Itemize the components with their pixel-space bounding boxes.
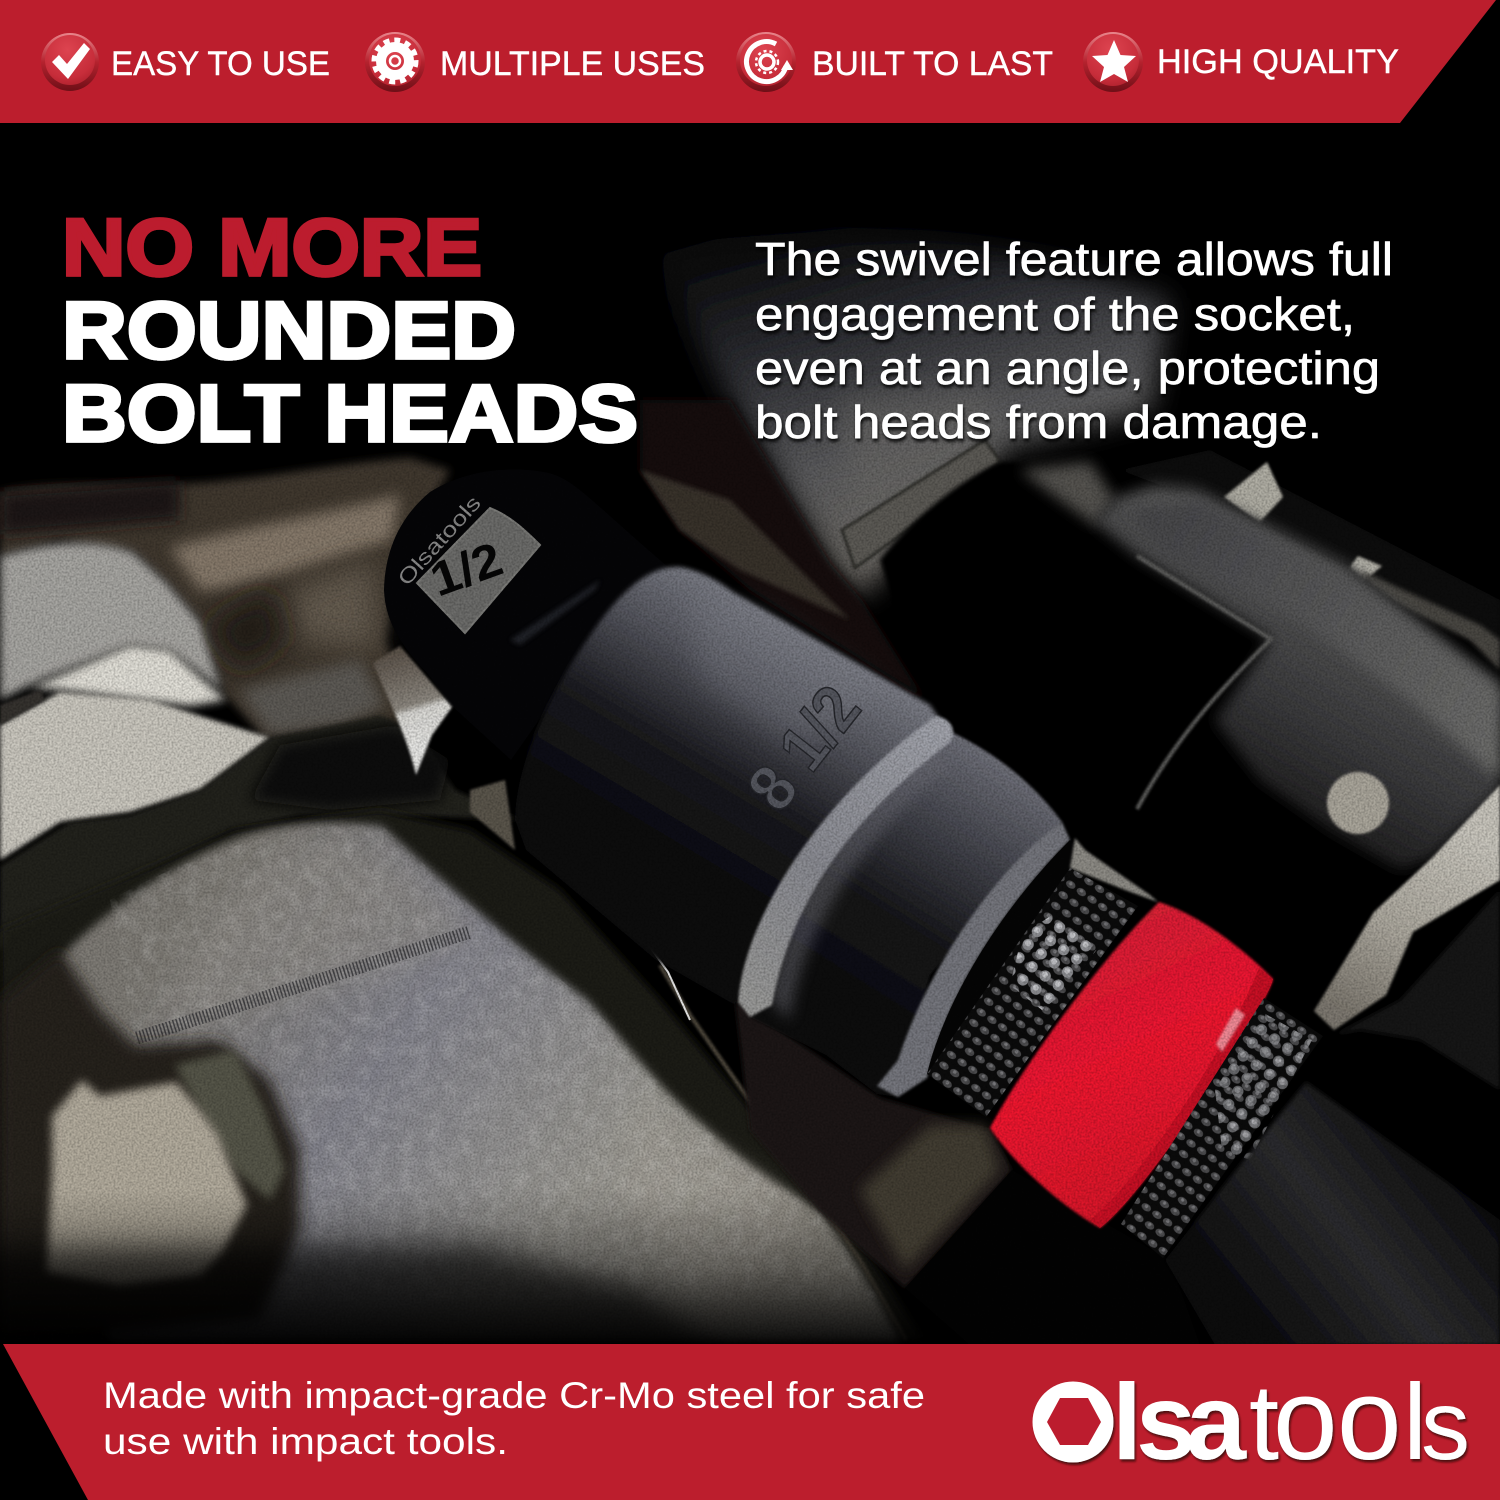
large black socket, right: [880, 462, 1500, 1090]
logo: Olsatools: o: [1337, 1354, 1402, 1484]
black drive shaft: [1165, 1082, 1500, 1345]
socket light grey collar: [738, 716, 953, 1017]
benefit: high quality: HIGH QUALITY: [1157, 43, 1399, 81]
headline line: no more: NO MORE: [62, 203, 482, 293]
logo: Olsatools: l: [1403, 1361, 1427, 1482]
icon: circular arrow with gear: [736, 32, 796, 92]
logo: Olsatools: t: [1249, 1361, 1279, 1482]
description paragraph: bolt heads from damage.: [755, 396, 1322, 448]
headline: [62, 203, 638, 459]
engine metal: upper left casting: [0, 458, 520, 950]
swivel black joint with size badge: [373, 469, 668, 775]
knurled ring, right: [1121, 998, 1323, 1258]
badge brand mark: Olsatools: [394, 492, 486, 590]
benefit: built to last: BUILT TO LAST: [812, 45, 1053, 83]
footer note: use with impact tools.: [103, 1421, 508, 1462]
pipe serrated line: [137, 932, 470, 1038]
white shard: [373, 646, 452, 775]
logo: Olsatools: lsa: [1112, 1361, 1247, 1482]
knurled ring, left: [927, 868, 1138, 1117]
icon: checkmark: [41, 33, 99, 91]
red collar: [990, 902, 1273, 1228]
socket inner dark gap: [927, 840, 1090, 1074]
benefit: easy to use: EASY TO USE: [111, 45, 330, 83]
pipe bottom fade: [0, 1190, 930, 1400]
size badge: 1/2: [424, 533, 509, 607]
headline line: rounded: ROUNDED: [62, 286, 516, 376]
description paragraph: [755, 233, 1393, 448]
headline line: bolt heads: BOLT HEADS: [62, 369, 638, 459]
engine metal: large silver pipe, lower left: [0, 810, 925, 1342]
wrench body, center top: [640, 235, 1170, 700]
pipe bright edge: [660, 965, 906, 1340]
icon: gear: [365, 32, 425, 92]
footer note: [103, 1375, 925, 1462]
bright silver casting: [0, 543, 222, 700]
corroded spot: [0, 950, 300, 1342]
logo: Olsatools: o: [1273, 1354, 1338, 1484]
description paragraph: engagement of the socket,: [755, 288, 1355, 340]
socket collar inner glow: [770, 735, 950, 1020]
header band: [0, 0, 1496, 123]
socket lit shoulder: [1093, 485, 1500, 870]
logo: Olsatools: s: [1421, 1370, 1470, 1480]
small bright bracket edge: [1070, 838, 1158, 902]
pipe mottled surface: [110, 825, 880, 1300]
socket lip: [877, 822, 1070, 1097]
description paragraph: even at an angle, protecting: [755, 342, 1380, 394]
footer band: [3, 1344, 1500, 1500]
icon: star: [1083, 32, 1143, 92]
size badge: [417, 508, 540, 633]
benefit: multiple uses: MULTIPLE USES: [440, 45, 705, 83]
dark casting seam: [0, 715, 520, 950]
right bracket highlights: [1120, 450, 1500, 670]
socket body: [515, 567, 940, 1005]
logo: Olsatools: [1032, 1354, 1470, 1484]
description paragraph: The swivel feature allows full: [755, 233, 1393, 285]
dark casting, center bottom: [470, 780, 1200, 1345]
logo: Olsatools: O: [1036, 1361, 1110, 1482]
footer note: Made with impact-grade Cr-Mo steel for safe: [103, 1375, 925, 1416]
socket embossed size text: 8 1/2: [733, 672, 874, 824]
socket barrel below collar: [750, 722, 1062, 1097]
wrench stamped marking: [842, 440, 1000, 568]
